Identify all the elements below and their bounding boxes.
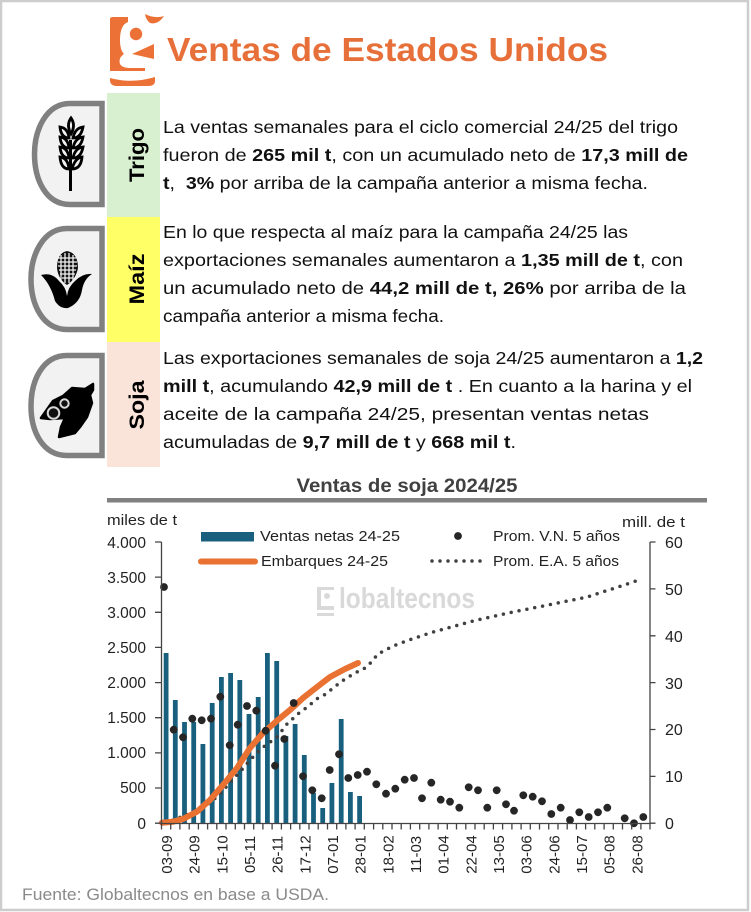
x axis date labels: 15-07 [574,835,591,874]
chart title: Ventas de soja 2024/25 [296,475,518,497]
soja text: aceite de la campaña 24/25, presentan ventas netas [163,404,649,424]
maiz text: campaña anterior a misma fecha. [163,306,444,326]
x axis date labels: 03-06 [518,835,536,874]
right axis labels: 40 [665,629,683,646]
left axis labels: 3.000 [107,605,146,622]
x axis date labels: 17-12 [298,835,314,874]
x axis date labels: 26-11 [270,836,286,873]
x axis date labels: 05-08 [602,835,618,874]
x axis date labels: 05-11 [242,836,259,873]
trigo vertical label: Trigo [126,128,149,182]
panel: maiz [31,217,686,342]
x axis date labels: 18-02 [380,835,398,874]
right axis labels: 60 [665,535,683,552]
trigo label band [107,93,160,217]
icon tab: soy [31,356,102,456]
x axis date labels: 24-06 [546,835,564,874]
line: embarques [162,663,358,823]
x axis date labels: 13-05 [491,835,508,874]
trigo text: La ventas semanales para el ciclo comercial 24/25 del trigo [163,117,678,137]
title: Ventas de Estados Unidos [167,31,608,68]
icon tab: wheat [34,104,102,204]
panel: trigo [34,93,688,217]
x axis date labels: 28-01 [352,835,370,874]
legend: Ventas netas 24-25 [260,529,400,545]
x axis date labels: 22-04 [464,835,480,874]
watermark: lobaltecnos [339,583,475,615]
maiz text: En lo que respecta al maíz para la campaña 24/25 las [163,222,628,242]
maiz text: un acumulado neto de 44,2 mill de t, 26% por arriba de la [163,278,686,298]
x axis date labels: 07-01 [325,835,342,874]
left axis labels: 1.500 [107,710,146,727]
maiz text [163,222,686,326]
axis unit: mill. de t: mill. de t [622,515,685,531]
dots: prom. V.N. 5 años [160,583,647,827]
axis unit: miles de t: miles de t [107,513,177,529]
right axis labels: 20 [665,722,683,739]
x axis date labels: 11-03 [408,836,425,873]
left axis labels: 500 [120,780,146,797]
right axis labels: 0 [665,816,674,833]
trigo text: t, 3% por arriba de la campaña anterior a misma fecha. [163,173,648,193]
left axis labels: 4.000 [107,535,146,552]
x axis date labels: 24-09 [186,835,204,874]
left axis labels [107,535,146,833]
logo [110,14,164,86]
left axis labels: 3.500 [107,570,146,587]
x axis date labels: 15-10 [214,835,232,874]
soja text: acumuladas de 9,7 mill de t y 668 mil t . [163,432,516,452]
x axis date labels: 01-04 [436,835,452,874]
right axis labels: 50 [665,582,683,599]
soja vertical label: Soja [126,380,149,430]
right axis labels [665,535,683,833]
soja text [163,348,703,452]
legend: Embarques 24-25 [261,554,388,570]
maiz text: exportaciones semanales aumentaron a 1,35 mill de t , con [163,250,683,270]
axes [155,542,656,830]
icon tab: corn [31,228,102,330]
left axis labels: 1.000 [107,745,146,762]
legend [201,529,620,570]
left axis labels: 0 [137,816,146,833]
bars: ventas netas [164,653,362,823]
soja label band [107,342,160,467]
maiz label band [107,217,160,342]
chart: ventas de soja [107,513,685,874]
maiz vertical label: Maíz [126,254,149,304]
panel: soja [31,342,703,467]
trigo text [163,117,688,193]
soja text: mill t , acumulando 42,9 mill de t . En cuanto a la harina y el [163,376,692,396]
right axis labels: 30 [665,676,683,693]
legend: Prom. V.N. 5 años [493,529,620,545]
trigo text: fueron de 265 mil t , con un acumulado neto de 17,3 mill de [163,145,688,165]
x axis date labels: 03-09 [159,835,176,874]
left axis labels: 2.500 [107,640,146,657]
x axis date labels: 26-08 [630,835,646,874]
right axis labels: 10 [665,769,683,786]
soja text: Las exportaciones semanales de soja 24/25 aumentaron a 1,2 [163,348,703,368]
x axis date labels [159,835,646,874]
legend: Prom. E.A. 5 años [493,554,619,570]
dotted line: prom. E.A. 5 años [165,579,642,823]
left axis labels: 2.000 [107,675,146,692]
source note: Fuente: Globaltecnos en base a USDA. [22,886,329,904]
